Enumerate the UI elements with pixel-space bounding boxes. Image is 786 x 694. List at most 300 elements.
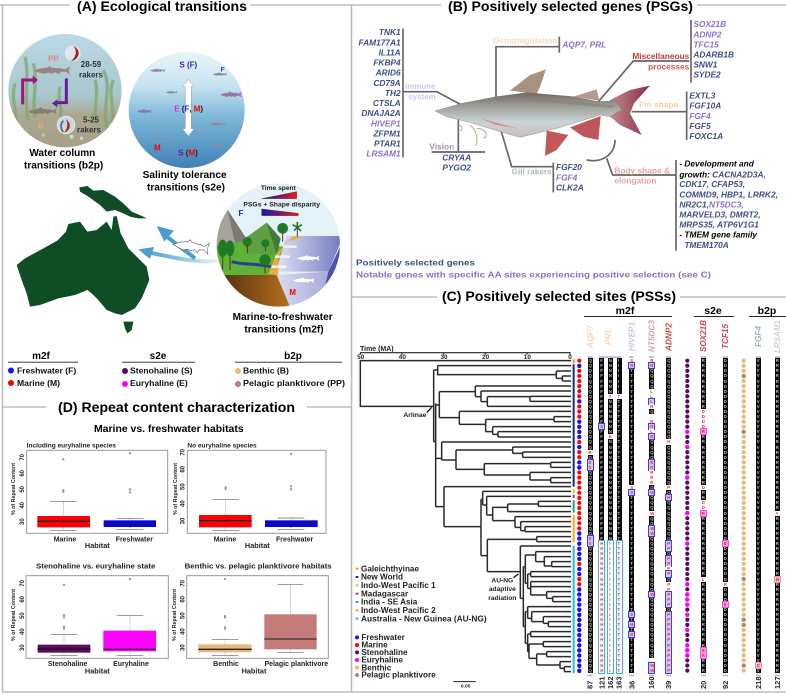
alignment column: FGF4 site 218: VVVVVVVVVVVVVVVVVVVVVVVVVVVVVVVVVVVVVVVVVVVVVVVVVVVVVVVVVVVV V [757, 358, 762, 673]
pelagic fish [33, 66, 70, 74]
chart: no euryhaline species: % of Repeat Content [173, 463, 179, 515]
alignment column: PRL site 162: T [609, 394, 613, 399]
alignment column: NT5DC3 site 160: L [650, 429, 655, 434]
alignment column: NT5DC3 site 160: QQQQ Q QQQQ Q QQQ QQ QQQQQQQQQQQ QQQQQQQQQQQQ [650, 368, 656, 658]
soil [224, 275, 290, 307]
alignment column: LRSAM1 site 127: H [776, 577, 781, 582]
site numbers: 87 [586, 681, 594, 689]
gene group: body shape and elongation: NR2C1,NT5DC3, [679, 199, 744, 209]
water column label [24, 148, 103, 172]
scale bar [453, 682, 476, 690]
D subheading: Marine vs. freshwater habitats [94, 424, 244, 435]
alignment column: NT5DC3 site 160: RR [650, 460, 655, 470]
panel A: ecological transitions [8, 34, 343, 336]
gene colour legend: Notable genes with specific AA sites experiencing positive selection (see C) [356, 269, 711, 279]
alignment column: SOX21B site 20: D [702, 500, 707, 505]
legend: state categories: Marine (M) [17, 378, 60, 388]
chart: benthic vs pelagic planktivore: 40 [180, 628, 186, 635]
gene group: immune system [359, 27, 436, 159]
gene group: immune system: CTSLA [373, 98, 401, 108]
trees [218, 223, 288, 266]
gene group: body shape and elongation: growth: CACNA2D3A, [678, 169, 766, 179]
gene group: body shape and elongation: TMEM170A [684, 240, 729, 250]
chart: including euryhaline species [11, 443, 168, 550]
chart: including euryhaline species: Including euryhaline species [27, 443, 116, 450]
gene group: immune system: ZFPM1 [372, 129, 401, 139]
title C: (C) Positively selected sites (PSSs) [442, 289, 676, 304]
chart: including euryhaline species: Habitat [85, 541, 110, 550]
chart: no euryhaline species: 40 [181, 500, 187, 507]
chart: no euryhaline species [173, 443, 326, 550]
legend: state categories [8, 351, 345, 388]
chart: stenohaline vs euryhaline: Stenohaline [48, 661, 88, 668]
clade legend: New World [361, 573, 403, 582]
chart: stenohaline vs euryhaline: 60 [20, 595, 26, 603]
alignment column: NT5DC3 site 160: W [650, 490, 656, 495]
time axis: 50 [357, 354, 365, 361]
alignment column: HIVEP1 site 36: S [630, 632, 635, 637]
alignment column: NT5DC3 site 160: R [650, 363, 655, 368]
salinity circle: S (M) [178, 148, 198, 157]
gene group: gill rakers [512, 162, 584, 193]
ocean [278, 236, 340, 272]
alignment column: HIVEP1 site 36: H [630, 622, 635, 627]
section headers over columns: b2p [758, 305, 776, 317]
gene colour legend: Positively selected genes [356, 258, 475, 268]
habitat dots: marine and freshwater [577, 361, 581, 672]
gene group: fin shape: FGF10A [689, 101, 721, 111]
gene group: immune system: ARID6 [375, 68, 401, 78]
alignment column: FGF4 site 218 [756, 358, 761, 673]
alignment column: NT5DC3 site 160 [649, 358, 654, 673]
section headers over columns: m2f [616, 305, 635, 317]
salinity label: transitions (s2e) [147, 183, 225, 194]
state legend: Stenohaline [361, 648, 408, 657]
time spent wedge: Time spent [261, 185, 297, 192]
clade legend: Galeichthyinae [361, 564, 419, 573]
gene group: miscellaneous: Miscellaneous [632, 51, 690, 61]
habitat dots: stenohaline and euryhaline [685, 361, 689, 672]
site numbers: 160 [647, 676, 656, 689]
gene group: immune system: PTAR1 [374, 139, 401, 149]
water column circle: PP [48, 54, 59, 63]
water column label: Water column [29, 148, 95, 159]
alignment column: TCF15 site 92: DDDDDDDDDDDDDDDDDDDDDDDDDDDDDDDDDDDD DDDDDDD DDD DDDDDDDDDDDDD [724, 358, 729, 673]
chart: no euryhaline species: 60 [181, 465, 187, 473]
gene group: immune system: HIVEP1 [371, 118, 401, 128]
rotated gene headers: LRSAM1 [772, 320, 782, 353]
outflow [272, 247, 297, 267]
gene colour legend [356, 258, 711, 279]
gene group: immune system: system [408, 92, 436, 101]
gene group: fin shape: Fin shape [639, 100, 679, 110]
legend: state categories: Benthic (B) [243, 366, 289, 376]
state legend [355, 633, 436, 680]
beach [268, 236, 302, 275]
site numbers: 163 [614, 676, 624, 689]
legend: state categories: Stenohaline (S) [130, 366, 193, 376]
rotated gene headers: HIVEP1 [626, 322, 636, 351]
alignment column: AQP7 site 87 [588, 358, 592, 673]
alignment column: PRL site 121: S [600, 424, 605, 429]
chart: no euryhaline species: No euryhaline species [187, 443, 257, 450]
alignment column: ADNP2 site 39 [666, 358, 671, 673]
site numbers: 121 [598, 676, 606, 689]
benthic fish [27, 107, 57, 115]
fish photograph illustration [435, 69, 650, 156]
alignment column: SOX21B site 20: D [702, 505, 707, 510]
chart: benthic vs pelagic planktivore: 70 [180, 579, 186, 587]
panel B: positively selected genes [356, 19, 778, 279]
state legend: Euryhaline [361, 656, 403, 665]
label: AU-NG adaptive radiation: AU-NG [491, 577, 513, 584]
legend: state categories: s2e [150, 351, 167, 362]
gene group: body shape and elongation: CDK17, CFAP53, [679, 179, 745, 189]
gene group: miscellaneous: processes [648, 61, 690, 71]
alignment column: HIVEP1 site 36: S [630, 358, 635, 363]
section headers over columns [584, 305, 786, 317]
state legend: Pelagic planktivore [361, 671, 436, 680]
alignment column: PRL site 121 [599, 358, 604, 673]
alignment column: FGF4 site 218: C [757, 663, 762, 668]
alignment column: SOX21B site 20: RRRRRRRRRR RRRRRRRRRR RR RRRRRRRRRRRR RRRRRRRRRRRRR RRR [702, 358, 707, 673]
chart: no euryhaline species: 50 [181, 483, 187, 490]
gene group: miscellaneous: SNW1 [693, 60, 718, 70]
gene group: immune system: IL11A [379, 47, 401, 57]
scale bar: 0.05 [461, 684, 471, 690]
chart: stenohaline vs euryhaline [11, 562, 168, 675]
chart: benthic vs pelagic planktivore: 30 [180, 644, 186, 651]
mountain [216, 210, 246, 256]
label: AU-NG adaptive radiation: radiation [488, 595, 516, 602]
salinity double arrow [182, 79, 194, 136]
gene group: gill rakers: CLK2A [556, 183, 584, 193]
alignment column: LRSAM1 site 127: RRRRRRRRRRRRRRRRRRRRRRRRRRRRRR RRRRRRRRRRRR RRRRRRRRRRRRRRRRRR [776, 358, 781, 673]
gene group: body shape and elongation: COMMD9, HBP1, LRRK2, [679, 189, 778, 199]
alignment column: SOX21B site 20: RR [702, 648, 707, 658]
alignment column: PRL site 163: T [618, 394, 622, 399]
gene group: body shape and elongation: MRPS35, ATP6V1G1 [679, 219, 759, 229]
chart: benthic vs pelagic planktivore: Benthic vs. pelagic planktivore habitats [185, 562, 332, 571]
label: Arlinae [403, 407, 432, 419]
alignment column: NT5DC3 site 160: R [650, 475, 655, 480]
water column circle: B [38, 122, 44, 131]
alignment column: SOX21B site 20: D [702, 409, 707, 414]
gene group: immune system: FAM177A1 [359, 37, 401, 47]
alignment column: HIVEP1 site 36: S [630, 485, 635, 490]
alignment column: AQP7 site 87: R [588, 450, 594, 455]
rotated gene headers: SOX21B [698, 320, 708, 352]
alignment column: ADNP2 site 39: PPPPPPPPPPPP [667, 612, 672, 673]
rotated gene headers: PRL [603, 328, 613, 345]
alignment column: SOX21B site 20: R [702, 511, 707, 516]
gene group: body shape and elongation: elongation [614, 176, 656, 186]
alignment column: ADNP2 site 39: QQQQQQQQQQQQQQQQ QQQQQQQQ Q QQQQQQQQ Q Q Q [667, 358, 673, 612]
site numbers: 218 [754, 676, 763, 689]
chart: including euryhaline species: 50 [20, 485, 26, 493]
alignment column: SOX21B site 20: D [702, 485, 707, 490]
water column circle [8, 34, 122, 147]
alignment column: LRSAM1 site 127: = [776, 511, 780, 516]
alignment column: NT5DC3 site 160: R [650, 424, 655, 429]
gene group: osmoregulation [493, 36, 606, 50]
chart: no euryhaline species: 70 [181, 448, 187, 456]
gene group: body shape and elongation [614, 159, 778, 250]
alignment column: ADNP2 site 39: P [667, 587, 672, 592]
gene group: osmoregulation: AQP7, PRL [561, 40, 606, 50]
clade legend: Australia - New Guinea (AU-NG) [361, 614, 487, 623]
salinity circle: F [221, 67, 225, 74]
mouth bubbles [65, 45, 81, 61]
site numbers: 39 [664, 681, 673, 689]
alignment column: TCF15 site 92 [723, 358, 728, 673]
chart: stenohaline vs euryhaline: 70 [20, 579, 26, 587]
chart: no euryhaline species: Habitat [245, 541, 270, 550]
gene group: fin shape: FGF4 [689, 111, 711, 121]
chart: stenohaline vs euryhaline: % of Repeat Content [11, 589, 17, 641]
shape disparity wedge: PSGs + Shape disparity [243, 202, 320, 209]
marine-to-freshwater label [233, 312, 333, 336]
chart: no euryhaline species: Freshwater [276, 536, 314, 543]
gene group: vision: Vision [429, 142, 454, 152]
chart: benthic vs pelagic planktivore [172, 562, 332, 675]
chart: including euryhaline species: 70 [20, 453, 26, 461]
gene group: body shape and elongation: MARVELD3, DMRT2, [679, 209, 761, 219]
gene group: miscellaneous: ADARB1B [692, 49, 734, 59]
legend: state categories: b2p [284, 351, 302, 362]
water column circle: rakers [79, 70, 104, 79]
gene group: gill rakers: FGF4 [556, 172, 578, 182]
alignment column: AQP7 site 87: SS [588, 460, 593, 470]
alignment column: HIVEP1 site 36: TTTTTTTTTTTTTTTTTTTTTTT TTTTTTTTTTTTTTTTTTTTTTT T T TTTTTTT [630, 368, 635, 673]
alignment column: NT5DC3 site 160: R [650, 419, 655, 424]
chart: benthic vs pelagic planktivore: Habitat [242, 666, 267, 675]
alignment column: HIVEP1 site 36: R [630, 363, 635, 368]
marine to freshwater circle: F [239, 209, 244, 218]
time axis: 30 [440, 354, 448, 361]
gene group: fin shape: FOXC1A [689, 131, 723, 141]
title D: (D) Repeat content characterization [58, 400, 295, 415]
gene group: fin shape [639, 91, 723, 141]
time axis [357, 346, 572, 361]
chart: benthic vs pelagic planktivore: Pelagic planktivore [264, 661, 328, 668]
site numbers: 20 [699, 681, 708, 689]
land [213, 242, 283, 275]
state legend: Benthic [361, 663, 392, 672]
chart: stenohaline vs euryhaline: Habitat [85, 666, 110, 675]
clade legend: Indo-West Pacific 1 [361, 581, 436, 590]
clade colour strip [573, 359, 575, 673]
gene group: immune system: TNK1 [379, 27, 401, 37]
gene group: immune system: LRSAM1 [366, 149, 401, 159]
map: Australia and New Guinea [17, 186, 149, 333]
water column circle: 28-59 [81, 60, 102, 69]
label: AU-NG adaptive radiation: adaptive [489, 586, 516, 593]
gene group: immune system: CD79A [373, 78, 401, 88]
alignment column: PRL site 163 [616, 358, 622, 673]
alignment column: NT5DC3 site 160: R [650, 358, 655, 363]
chart: benthic vs pelagic planktivore: Benthic [213, 661, 239, 668]
chart: stenohaline vs euryhaline: 30 [20, 644, 26, 651]
site numbers: 127 [773, 676, 782, 689]
alignment column: ADNP2 site 39: PP [667, 541, 672, 551]
alignment column: NT5DC3 site 160: WW [650, 526, 656, 536]
clade legend: Madagascar [361, 589, 409, 598]
alignment column: TCF15 site 92: R [724, 582, 729, 587]
clade legend: Indo-West Pacific 2 [361, 606, 436, 615]
alignment column: HIVEP1 site 36: S [630, 490, 635, 495]
salinity label [143, 170, 227, 194]
alignment column: ADNP2 site 39: P [667, 582, 672, 587]
gene group: immune system: DNAJA2A [361, 108, 401, 118]
alignment column: NT5DC3 site 160: WW [650, 663, 656, 673]
transition arrows [23, 80, 33, 104]
chart: including euryhaline species: 60 [20, 469, 26, 477]
site numbers [586, 676, 782, 689]
salinity circle: S (F) [179, 60, 198, 69]
alignment column: NT5DC3 site 160: L [650, 389, 655, 394]
alignment column: ADNP2 site 39: PPP [667, 592, 672, 607]
alignment column: NT5DC3 site 160: W [650, 592, 656, 597]
site numbers: 36 [628, 681, 636, 689]
label: AU-NG adaptive radiation [488, 574, 518, 602]
alignment column: NT5DC3 site 160: R [650, 434, 655, 439]
label: Arlinae: Arlinae [403, 412, 427, 419]
water column circle: rakers [77, 125, 102, 134]
chart: no euryhaline species: 30 [181, 517, 187, 524]
state legend: Marine [361, 641, 388, 650]
connector lines [403, 20, 691, 251]
alignment column: NT5DC3 site 160: R [650, 404, 655, 409]
chart: including euryhaline species: Freshwater [116, 536, 153, 543]
chart: stenohaline vs euryhaline: Euryhaline [113, 661, 149, 668]
panel D: repeat content charts [11, 424, 332, 675]
alignment column: LRSAM1 site 127 [775, 358, 780, 673]
alignment column: PRL site 121: HHHHHHHHHHHHHHHHHHHHHHHHHH [600, 541, 605, 673]
time axis: 20 [482, 354, 490, 361]
chart: no euryhaline species: Marine [214, 536, 236, 543]
alignment column: PRL site 162 [608, 358, 613, 673]
marine-to-freshwater label: transitions (m2f) [244, 325, 324, 336]
alignment column: ADNP2 site 39: PP [667, 556, 672, 566]
gene group: miscellaneous: SOX21B [693, 19, 726, 29]
alignment column: ADNP2 site 39: H [667, 495, 672, 500]
alignment column: ADNP2 site 39: H [667, 439, 672, 444]
water column label: transitions (b2p) [24, 161, 103, 172]
marine to freshwater circle: M [289, 288, 296, 297]
alignment column: TCF15 site 92: E [724, 541, 729, 546]
time axis: 10 [524, 354, 531, 361]
gene group: miscellaneous: ADNP2 [692, 29, 722, 39]
rotated gene headers: FGF4 [753, 326, 763, 347]
gene group: immune system: FKBP4 [373, 57, 401, 67]
marine to freshwater circle [213, 183, 343, 308]
alignment column: PRL site 121: FFFFFFFFFFFFF FFFFFFFFFFFFFFFFFFFFFF [600, 358, 605, 541]
dispersal arrows [138, 226, 217, 261]
gene group: immune system: Immune [405, 82, 436, 91]
gene group: body shape and elongation: - Development and [679, 159, 755, 169]
rotated gene headers: TCF15 [720, 324, 730, 349]
time axis: 0 [568, 354, 572, 361]
salinity circle: E (F, M) [174, 104, 203, 113]
chart: benthic vs pelagic planktivore: % of Repeat Content [172, 589, 178, 641]
marine-to-freshwater label: Marine-to-freshwater [233, 312, 333, 323]
gene group: gill rakers: Gill rakers [512, 167, 552, 177]
alignment column: ADNP2 site 39: P [667, 566, 672, 571]
rotated gene headers [585, 320, 782, 353]
alignment column: NT5DC3 site 160: W [650, 511, 656, 516]
alignment column: PRL site 162: K [609, 434, 614, 439]
alignment column: TCF15 site 92: E [724, 602, 729, 607]
rotated gene headers: AQP7 [585, 324, 595, 349]
salinity circle: M [154, 144, 161, 153]
legend: state categories: Euryhaline (E) [130, 378, 188, 388]
chart: stenohaline vs euryhaline: 50 [20, 612, 26, 619]
chart: benthic vs pelagic planktivore: 50 [180, 612, 186, 619]
alignment column: PRL site 162: NNNNNNN NNNNNNN NNNNNNNNNNNNNNNNNNNN [609, 358, 614, 541]
river [232, 262, 271, 267]
time axis: 40 [399, 354, 406, 361]
site numbers: 92 [721, 681, 730, 689]
alignment column: SOX21B site 20: L [702, 577, 706, 582]
site numbers: 162 [606, 676, 615, 689]
alignment column: AQP7 site 87: SS [588, 536, 593, 546]
rotated gene headers: ADNP2 [664, 323, 674, 352]
alignment column: SOX21B site 20: R [702, 429, 707, 434]
phylogenetic tree [360, 361, 571, 672]
gene group: body shape and elongation: - TMEM gene family [679, 230, 757, 240]
state legend: Freshwater [361, 633, 406, 642]
water column circle: 5-25 [83, 115, 100, 124]
alignment column: NT5DC3 site 160: R [650, 480, 655, 485]
gene group: vision: PYGO2 [442, 163, 471, 173]
gene group: miscellaneous: SYDE2 [693, 70, 721, 80]
alignment column: AQP7 site 87: QQQQQQQQQQQQQQQQQQ Q QQQQQQQQQQQQQ QQQQQQQQQQQQQQQQQQQQQQQQQ [588, 358, 594, 673]
alignment column: SOX21B site 20: D [702, 414, 707, 419]
legend: state categories: m2f [32, 351, 51, 362]
chart: benthic vs pelagic planktivore: 60 [180, 595, 186, 603]
alignment column: PRL site 163: IIIIIII TTTTTTTTTTTTTTTTTTTTTTTTTTTT [618, 358, 622, 541]
chart: stenohaline vs euryhaline: 40 [20, 628, 26, 635]
alignment column: SOX21B site 20 [701, 358, 706, 673]
rotated gene headers: NT5DC3 [646, 320, 656, 352]
legend: state categories: Freshwater (F) [17, 366, 76, 376]
chart: including euryhaline species: 30 [20, 518, 26, 525]
gene group: gill rakers: FGF20 [556, 162, 582, 172]
gene group: osmoregulation: Osmoregulation [493, 36, 557, 46]
alignment column: PRL site 163: TTTTTTTTTTTTTTTTTTTTTTTTTT [618, 541, 622, 673]
chart: including euryhaline species: 40 [20, 501, 26, 509]
alignment column: HIVEP1 site 36 [629, 358, 634, 673]
section headers over columns: s2e [704, 305, 722, 317]
salinity circle [129, 52, 245, 168]
chart: including euryhaline species: % of Repeat Content [11, 463, 17, 515]
gene group: fin shape: FGF5 [689, 121, 711, 131]
chart: including euryhaline species: Marine [54, 536, 76, 543]
legend: state categories: Pelagic planktivore (PP) [243, 378, 345, 388]
alignment column: ADNP2 site 39: P [667, 571, 672, 576]
alignment column: NT5DC3 site 160: L [650, 399, 655, 404]
gene group: vision: CRYAA [442, 153, 471, 163]
panel C: phylogeny [355, 346, 575, 690]
alignment column: SOX21B site 20: D [702, 424, 707, 429]
alignment column: NT5DC3 site 160: R [650, 470, 655, 475]
alignment column: PRL site 162: IIIIIIIIIIIIIIIIIIIIIIIIII [609, 541, 612, 673]
gene group: fin shape: EXTL3 [689, 91, 716, 101]
alignment column: HIVEP1 site 36: S [630, 612, 635, 617]
gene group: miscellaneous [632, 19, 734, 80]
salinity label: Salinity tolerance [143, 170, 227, 181]
